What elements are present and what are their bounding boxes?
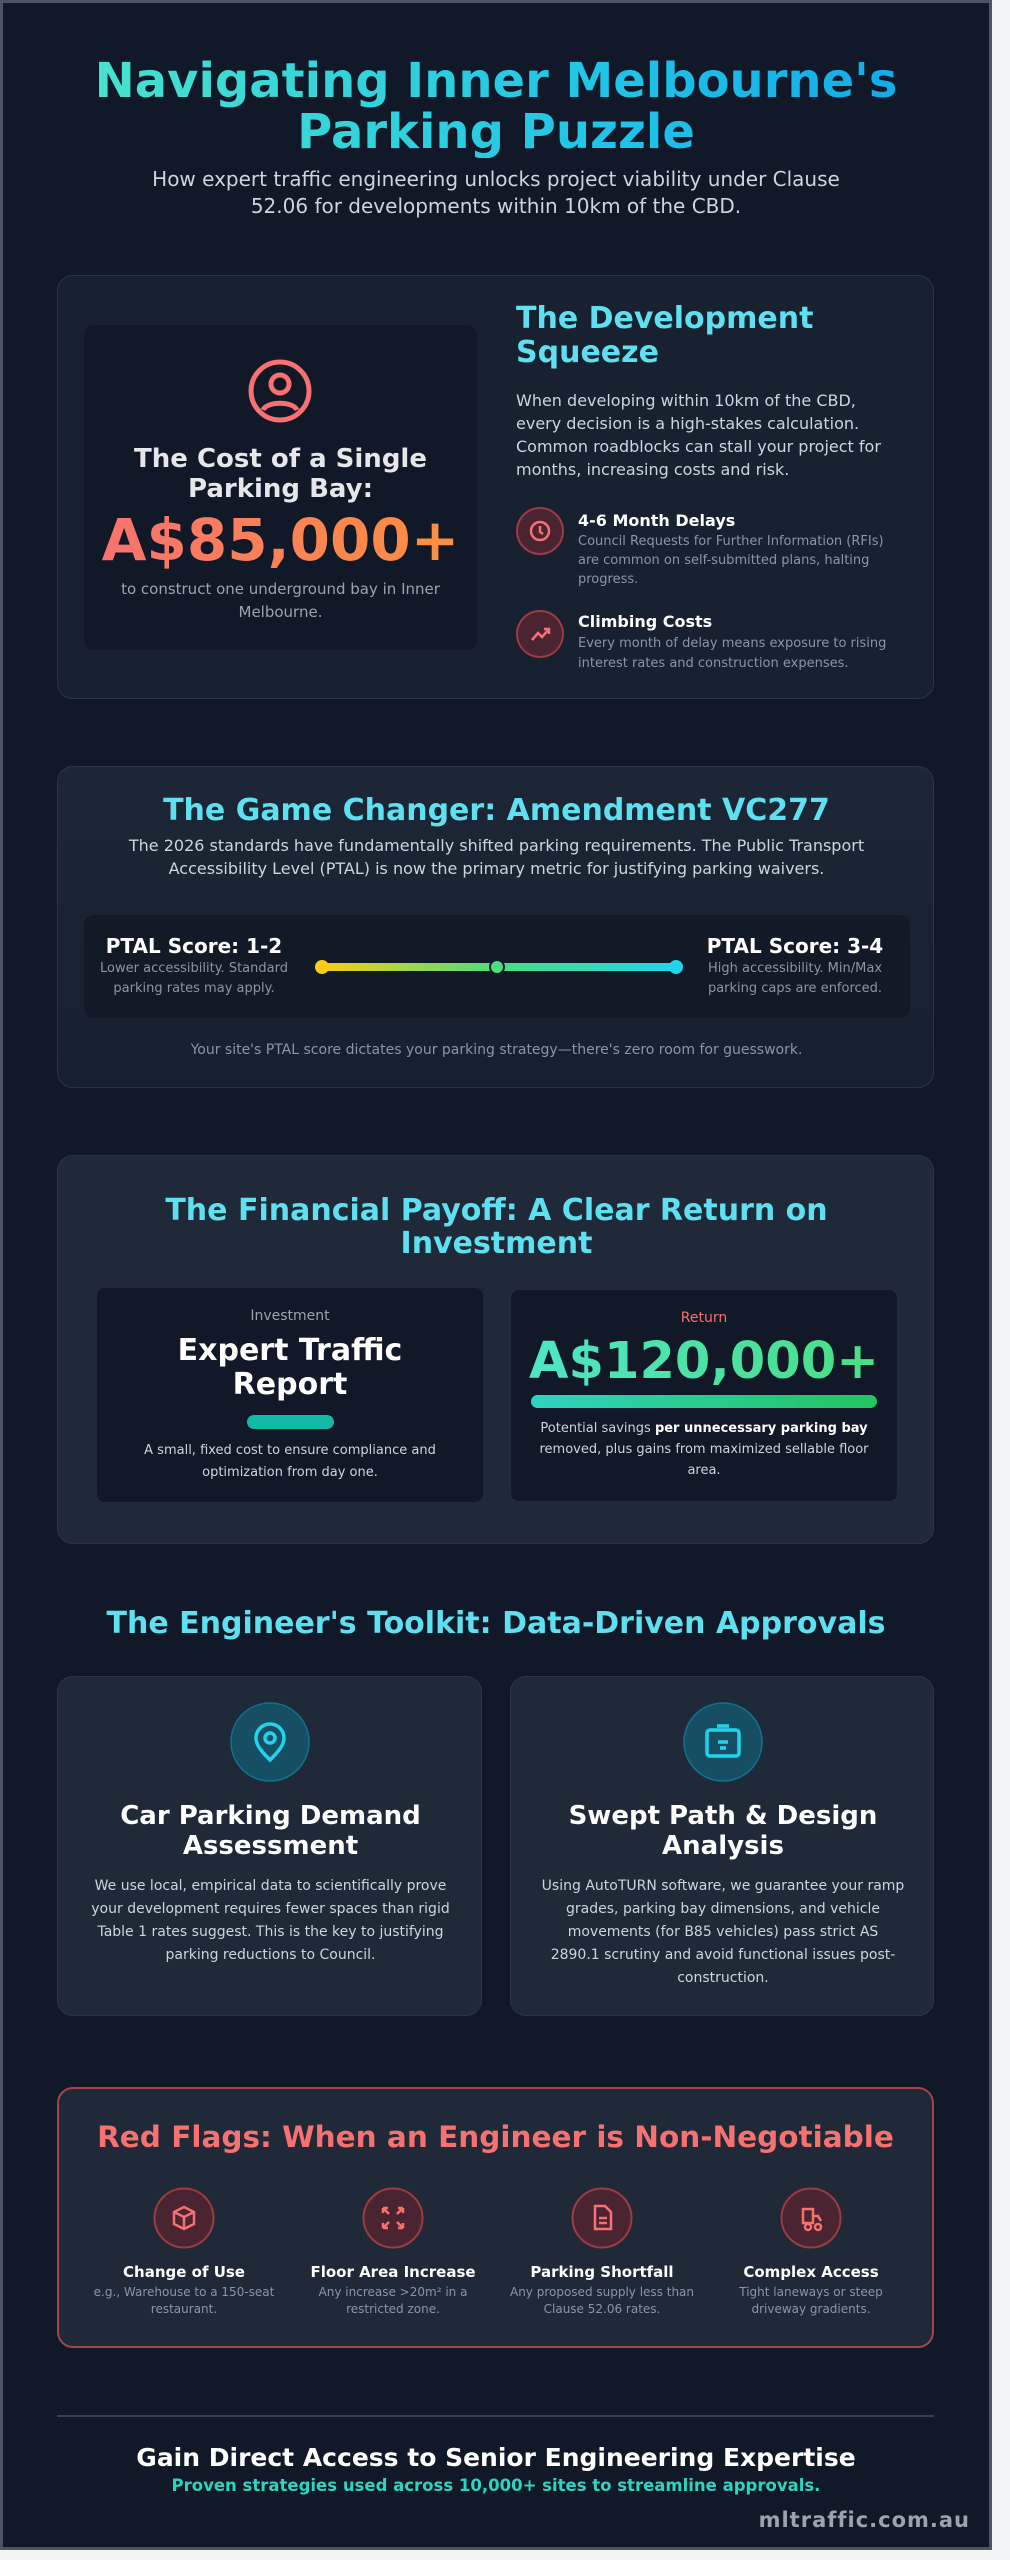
text: cost heading: The Cost of a Single [134,444,427,474]
stat: A$85,000+: A$85,000+ [102,506,459,574]
item: floor area increase [310,2188,476,2316]
item: complex access [739,2188,883,2316]
text: squeeze intro: When developing within 10km of the CBD, every decision is a high-stakes calculation. Common roadblocks can stall your project for months, increasing costs and risk. [516,391,881,479]
text: cost caption: to construct one underground bay in Inner Melbourne. [121,580,440,621]
card: cost of parking bay [84,325,477,650]
panel: financial payoff [57,1155,934,1544]
item: change of use: Change of Use [123,2263,245,2281]
card: return: Potential savings per unnecessary parking bay removed, plus gains from maximized sellable floor area. [539,1421,869,1478]
item: climbing costs: Climbing Costs [578,612,712,631]
text: ptal intro: The 2026 standards have fundamentally shifted parking requirements. The Public Transport Accessibility Level (PTAL) is now the primary metric for justifying parking waivers. [129,836,864,878]
card: return [511,1290,897,1501]
bar: large return [531,1395,877,1408]
heading: financial payoff: The Financial Payoff: A Clear Return on Investment [165,1193,828,1261]
item: complex access: Tight laneways or steep [739,2285,883,2299]
subtitle: How expert traffic engineering unlocks project viability under Clause 52.06 for developments within 10km of the CBD. [152,167,840,218]
label: PTAL 3-4: PTAL Score: 3-4 [707,934,883,958]
item: delays: Council Requests for Further Information (RFIs) are common on self-submitted plans, halting progress. [578,534,884,587]
card: investment [97,1288,483,1502]
card: parking demand: Car Parking Demand [120,1801,421,1831]
heading: engineer's toolkit: The Engineer's Toolkit: Data-Driven Approvals [107,1606,885,1641]
card: swept path: Using AutoTURN software, we guarantee your ramp grades, parking bay dimensions, and vehicle movements (for B85 vehicles) pass strict AS 2890.1 scrutiny and avoid functional issues post-construction. [542,1878,904,1986]
heading: red flags: Red Flags: When an Engineer is Non-Negotiable [97,2120,894,2154]
panel: red flags [57,2087,934,2348]
item: climbing costs [516,610,886,671]
panel: amendment VC277 [57,766,934,1088]
card: parking demand: Assessment [183,1831,358,1861]
label: PTAL 1-2 [100,934,288,996]
text: ptal footer: Your site's PTAL score dictates your parking strategy—there's zero room for guesswork. [191,1042,802,1058]
panel: development squeeze [57,275,934,699]
text: cost heading [134,444,427,504]
item: delays: 4-6 Month Delays [578,511,735,530]
label: PTAL 1-2: PTAL Score: 1-2 [106,934,282,958]
icon: clock [516,507,564,555]
item: parking shortfall [510,2188,694,2316]
card: swept path: Analysis [662,1831,784,1861]
card: swept path [510,1676,934,2016]
item: delays [516,507,884,587]
item: floor area increase: Any increase >20m² in a [319,2285,467,2299]
brand url: mltraffic.com.au [759,2508,970,2532]
card: investment: Report [233,1367,347,1402]
item: parking shortfall: Parking Shortfall [530,2263,674,2281]
card: parking demand [57,1676,482,2016]
item: complex access: Complex Access [743,2263,879,2281]
card: parking demand: We use local, empirical data to scientifically prove your development requires fewer spaces than rigid Table 1 rates suggest. This is the key to justifying parking reductions to Council. [91,1878,450,1963]
item: complex access: driveway gradients. [751,2302,871,2316]
heading: game changer: The Game Changer: Amendment VC277 [163,793,830,828]
icon: user circle [248,360,312,422]
label: PTAL 3-4 [707,934,883,996]
card: investment: Expert Traffic [178,1333,402,1368]
item: change of use [94,2188,274,2316]
card: investment: A small, fixed cost to ensure compliance and optimization from day one. [144,1443,436,1480]
item: floor area increase: restricted zone. [346,2302,440,2316]
text: cost heading: Parking Bay: [188,474,373,504]
item: change of use: e.g., Warehouse to a 150-seat restaurant. [94,2285,274,2316]
footer heading: Gain Direct Access to Senior Engineering Expertise [136,2443,856,2472]
card: return: A$120,000+ [529,1332,879,1391]
title [20,56,972,158]
chart: PTAL scale [84,915,910,1018]
item: floor area increase: Floor Area Increase [310,2263,476,2281]
bar: small cost pill [247,1415,334,1429]
item: climbing costs: Every month of delay means exposure to rising interest rates and construction expenses. [578,636,886,671]
title: Parking Puzzle [297,104,695,160]
card: investment: Investment [250,1308,330,1324]
label: PTAL 1-2: Lower accessibility. Standard parking rates may apply. [100,961,288,996]
footer tagline: Proven strategies used across 10,000+ sites to streamline approvals. [172,2476,820,2495]
card: swept path: Swept Path & Design [569,1801,877,1831]
label: PTAL 3-4: High accessibility. Min/Max parking caps are enforced. [708,961,882,996]
bar: gradient scale [315,960,683,974]
card: return: Return [681,1310,727,1326]
item: parking shortfall: Any proposed supply less than Clause 52.06 rates. [510,2285,694,2316]
icon: clipboard [683,1702,763,1782]
icon: trend up [516,610,564,658]
title: Navigating Inner Melbourne's [95,53,897,109]
icon: location pin [230,1702,310,1782]
heading: development squeeze: The Development Squeeze [516,301,813,370]
